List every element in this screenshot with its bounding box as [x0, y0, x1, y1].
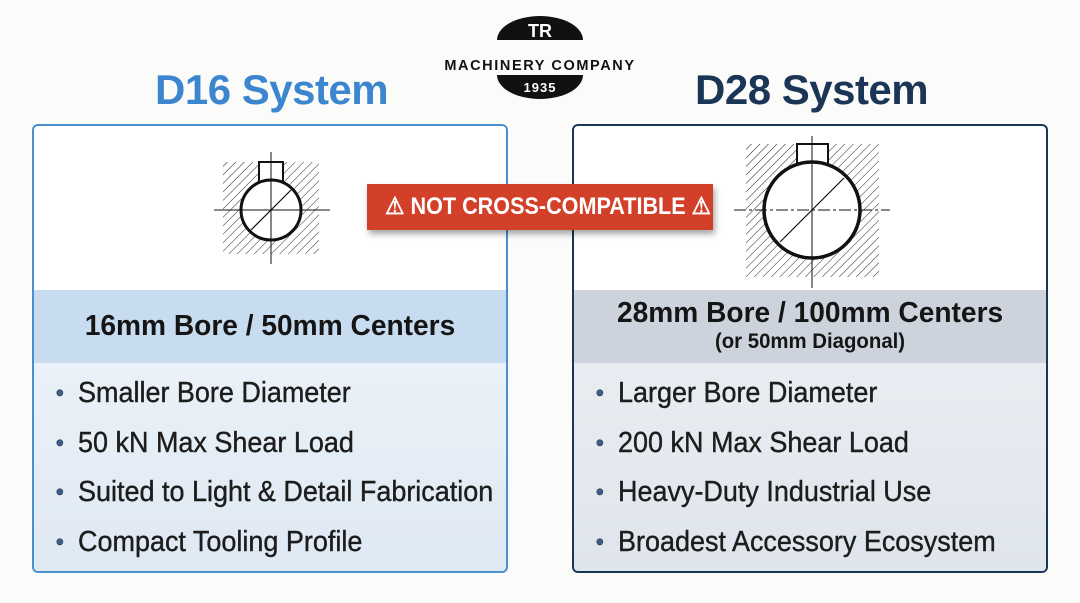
list: D28 features: •: [596, 528, 604, 554]
heading: D28 System: D28 System: [695, 66, 928, 113]
list: D28 features: 200 kN Max Shear Load: [618, 426, 909, 458]
logo: [444, 16, 636, 99]
list: D16 features: 50 kN Max Shear Load: [78, 426, 354, 458]
list: D16 features: •: [56, 479, 64, 504]
list: D28 features: •: [596, 479, 604, 504]
band: 28mm spec: [574, 290, 1046, 363]
list: D16 features: [34, 363, 506, 571]
band: 16mm spec: 16mm Bore / 50mm Centers: [85, 310, 455, 342]
heading: D16 System: D16 System: [155, 66, 388, 113]
band: 28mm spec: 28mm Bore / 100mm Centers: [617, 297, 1003, 329]
list: D28 features: Larger Bore Diameter: [618, 377, 877, 409]
logo: TR: [528, 21, 552, 41]
band: 16mm spec: [34, 290, 506, 363]
list: D16 features: •: [56, 380, 64, 405]
list: D28 features: Heavy-Duty Industrial Use: [618, 476, 931, 508]
logo: MACHINERY COMPANY: [444, 58, 636, 74]
list: D16 features: Compact Tooling Profile: [78, 526, 362, 558]
band: 28mm spec: (or 50mm Diagonal): [715, 330, 905, 353]
list: D28 features: •: [596, 430, 604, 454]
list: D16 features: •: [56, 430, 64, 454]
panel: D28: [572, 124, 1048, 573]
list: D16 features: •: [56, 528, 64, 554]
list: D28 features: •: [596, 380, 604, 405]
logo: 1935: [524, 80, 556, 95]
diagram: 28mm bore: [734, 136, 890, 288]
list: D28 features: Broadest Accessory Ecosystem: [618, 526, 996, 558]
list: D16 features: Smaller Bore Diameter: [78, 377, 351, 409]
warning banner: ⚠ NOT CROSS-COMPATIBLE ⚠: [385, 193, 711, 220]
list: D16 features: Suited to Light & Detail Fabrication: [78, 476, 493, 508]
warning banner: [367, 184, 713, 230]
diagram: 16mm bore: [214, 152, 330, 264]
list: D28 features: [574, 363, 1046, 571]
panel: D16: [32, 124, 508, 573]
